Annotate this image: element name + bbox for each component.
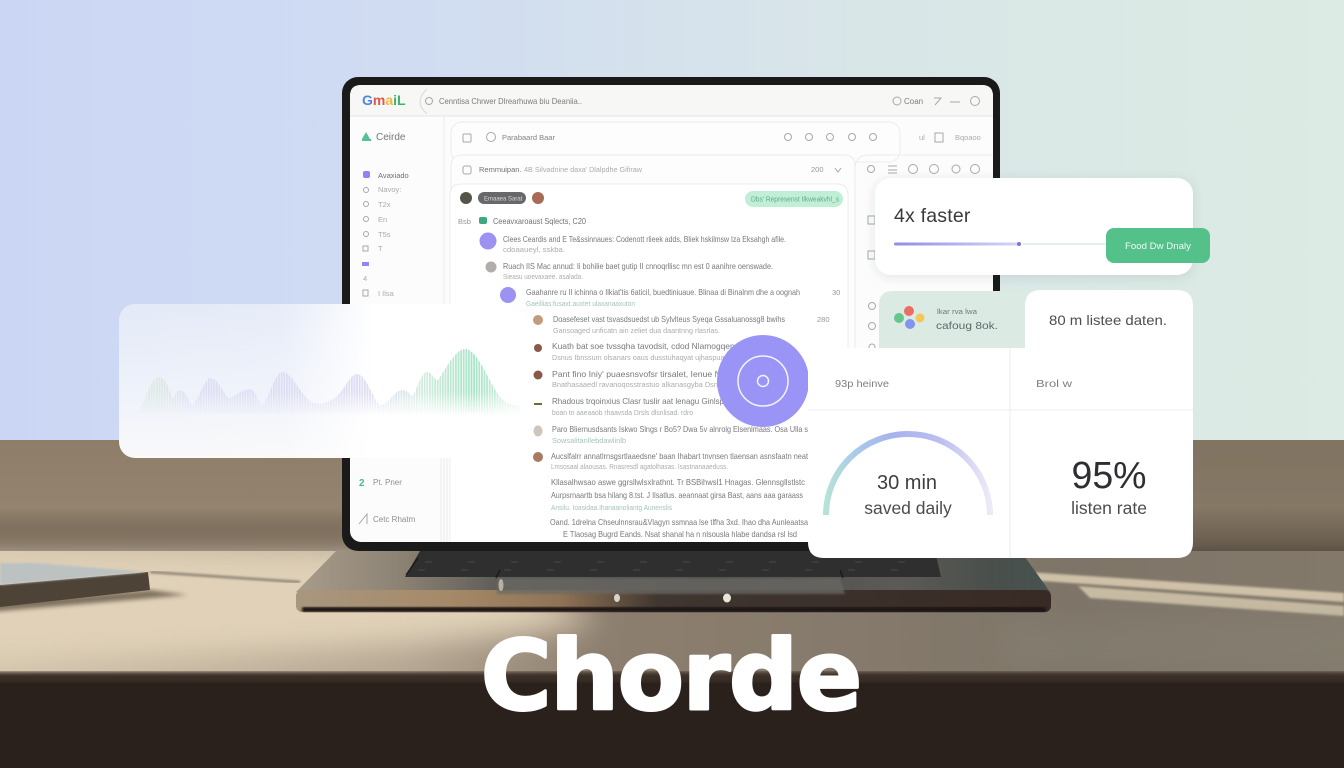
- search field: Parabaard Baar: [502, 133, 555, 142]
- app header bar: Coan: [904, 97, 923, 106]
- laptop screen bezel: [342, 77, 1000, 551]
- card: listen dates: 80 m listee daten.: [1049, 312, 1167, 328]
- mail thread panel: 200: [811, 165, 824, 174]
- message list: Bnathasaaedl ravanoqosstrastuo alkanasgyba Dsnu: [552, 380, 722, 389]
- laptop base and keyboard: [296, 550, 1051, 612]
- message list: Ruach IIS Mac annud: Ii bohilie baet gutip II cnnoqrllisc mn est 0 aanihre oenswade.: [503, 261, 773, 271]
- gauge: 30 min saved daily: [826, 434, 990, 518]
- app header bar: GmaiL: [362, 92, 406, 108]
- message list: Kuath bat soe tvssqha tavodsit, cdod Nlamogqen.: [552, 341, 737, 351]
- thread header chips: Dbs' Represenst Ilkweakvhl_s: [751, 194, 839, 204]
- sidebar: Pt. Pner: [373, 478, 402, 487]
- card: 4x faster: 4x faster: [894, 205, 971, 227]
- message list: Ansilu. Ioasidaa.Ihanaanoliantg Aunenslis: [551, 503, 672, 512]
- thread header chips: Ceeavxaroaust Sqlects, C20: [493, 217, 587, 226]
- message list: 30: [832, 288, 840, 297]
- thread header chips: Emaaea Sarat: [484, 196, 523, 202]
- thread header chips: Bsb: [458, 217, 471, 226]
- sidebar: T2x: [378, 200, 391, 209]
- message list: E Tlaosag Bugrd Eands. Nsat shanal ha n nlsousla hlabe dandsa rsl lsd: [563, 529, 797, 539]
- message list: cdoaaueyl, sskba.: [503, 245, 565, 254]
- laptop screen: mail app: [350, 85, 993, 542]
- card: 4x faster: [875, 178, 1210, 275]
- message list: Paro Bliernusdsants Iskwo Slngs r Bo5? Dwa 5v alnrolg Elsenlmaas. Osa Ulla s: [552, 424, 808, 434]
- message list: Aurpsrnaartb bsa hilang 8.tst. J Ilsatlus. aeannaat girsa Bast, aans aaa garaass: [551, 490, 803, 500]
- sidebar: T5s: [378, 230, 391, 239]
- mail thread panel: [450, 155, 855, 542]
- message list: Doasefeset vast tsvasdsuedst ub Sylvlteus Syeqa Gssaluanossg8 bwihs: [553, 314, 785, 324]
- sidebar: Avaxiado: [378, 171, 409, 180]
- waveform chart: [136, 349, 520, 414]
- stat: 95% listen rate: listen rate: [1071, 498, 1147, 518]
- mail thread panel: Remmuipan.: [479, 165, 522, 174]
- message list: Sieasu uoevaxaee. asalada.: [503, 272, 583, 281]
- card: listen dates: [1025, 290, 1193, 350]
- tablet on desk: [0, 563, 300, 612]
- message list: Gaahanre ru II ichinna o Ilkiat'tis 6aticil, buedtiniuaue. Blinaa di Binalnm dhe a oognah: [526, 287, 800, 297]
- stats card: [808, 348, 1193, 558]
- sidebar: Ceirde: [376, 132, 406, 143]
- message list: Gansoaged unficatn ain zeliet dua daantnng rlasrlas.: [553, 326, 720, 335]
- sidebar: 4: [363, 274, 367, 283]
- search field: [451, 122, 981, 162]
- message list: Dsnus Ibnssum olsanars oaus dusstuhaqyat ujhaspuans: [552, 353, 732, 362]
- waveform glass card: [119, 304, 527, 458]
- gauge: 30 min saved daily: 30 min: [877, 472, 937, 494]
- sidebar: Navoy:: [378, 185, 401, 194]
- card: coloured dots app tile: lkar rva lwa: [937, 309, 977, 316]
- message list: Sowsalitanllebdawlinlb: [552, 436, 626, 445]
- message list: Gaeillias:fusaxt.auxtet ulaxanaaxuton: [526, 299, 635, 308]
- purple audio disc: [717, 335, 809, 427]
- mail thread panel: 4B Silvadnine daxa' Dlalpdhe Gifiraw: [524, 165, 643, 174]
- message list: Aucslfalrr annatlrnsgsrtlaaedsne' baan Ihabart tnvnsen tlaensan asnsfaatn neat: [551, 451, 809, 461]
- sidebar: [359, 116, 528, 542]
- green action button: Food Dw Dnaly: [1125, 241, 1191, 252]
- message list: Pant fino Iniy' puaesnsvofsr tirsalet, Ienue Nilsr: [552, 369, 732, 379]
- card: coloured dots app tile: cafoug 8ok.: [936, 321, 998, 332]
- message list: Lmsosaal alaousas. Rnasresdl agatolhasas. Isastnanaaeduss.: [551, 462, 728, 471]
- app header bar: Cenntisa Chrwer Dlrearhuwa biu Deaniia..: [439, 96, 582, 106]
- message list: Kllasalhwsao aswe ggrsllwlsxlrathnt. Tr BSBihwsl1 Hnagas. Glennsgllstlstc: [551, 477, 806, 487]
- sidebar: I Ilsa: [378, 289, 395, 298]
- app header bar: [350, 85, 993, 116]
- card: coloured dots app tile: [879, 291, 1032, 350]
- stat: 95% listen rate: 95%: [1072, 455, 1146, 497]
- background: desk surface: [0, 551, 1344, 768]
- sidebar: 2: [359, 478, 365, 489]
- message list: Rhadous trqoinxius Clasr tuslir aat lenagu Ginlsp: [552, 396, 724, 406]
- message list: Clees Ceardis and E Te&ssinnaues: Codenott rlieek adds, Bliek hskilmsw Iza Eksahgh afile.: [503, 234, 786, 244]
- sidebar: En: [378, 215, 387, 224]
- message list: 280: [817, 315, 830, 324]
- green action button: [1106, 228, 1210, 263]
- sidebar: T: [378, 244, 383, 253]
- stats card: 93p heinve: [835, 379, 889, 390]
- gauge: 30 min saved daily: saved daily: [864, 498, 952, 518]
- thread header chips: [458, 191, 843, 226]
- message list: boan tn aaeaaob rhaavsda Drsls dlsnlisad. rdro: [552, 408, 693, 417]
- search field: Bqoaoo: [955, 133, 981, 142]
- sidebar: Cetc Rhatm: [373, 515, 416, 524]
- stats card: Brol w: [1036, 379, 1073, 390]
- right side panel: [855, 155, 993, 542]
- message list: Oand. 1drelna Chseulnnsrau&Vlagyn ssmnaa lse tlfha 3xd. Ihao dha Aunleaatsa: [550, 517, 808, 527]
- title: Chorde: [481, 620, 861, 732]
- search field: ul: [919, 133, 925, 142]
- background: sky and wall: [0, 0, 1344, 552]
- message list: [480, 232, 840, 539]
- stat: 95% listen rate: [1071, 455, 1147, 518]
